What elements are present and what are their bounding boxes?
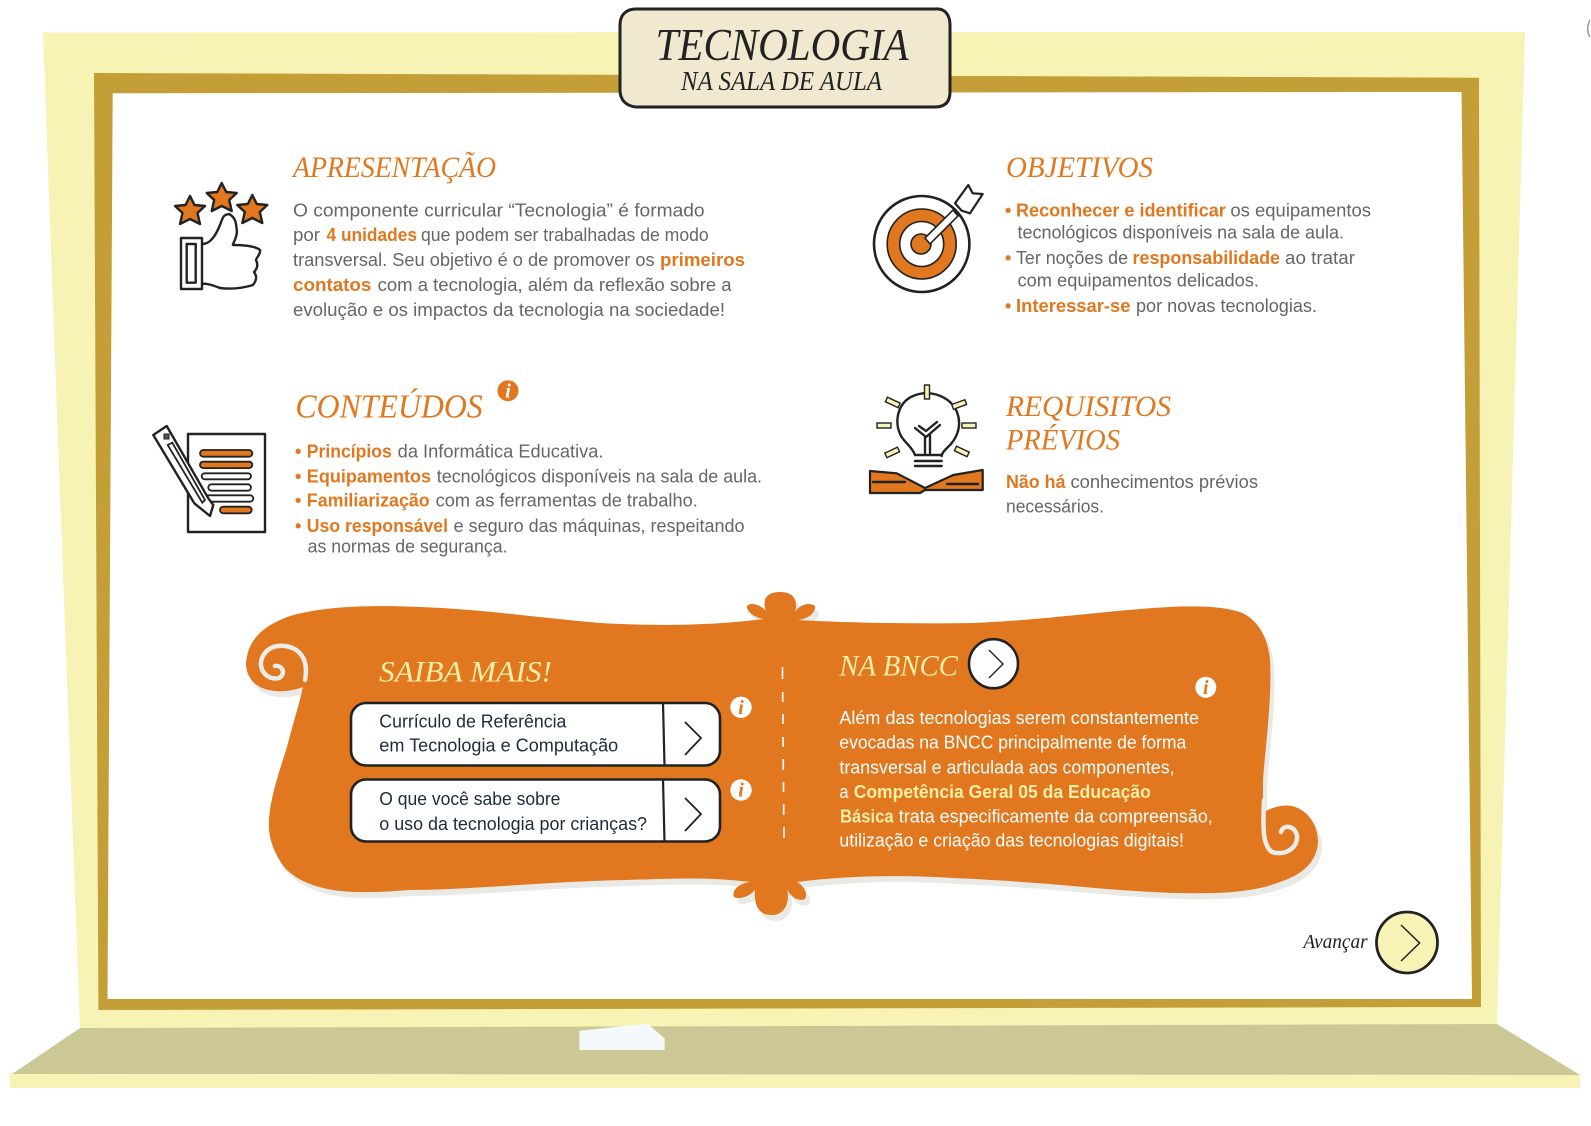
icon: info xyxy=(1195,677,1216,699)
panel: orange scroll xyxy=(246,592,1322,921)
text block: com a tecnologia, além da reflexão sobre a xyxy=(378,275,733,295)
title: TECNOLOGIA xyxy=(656,19,909,70)
bullet list: com as ferramentas de trabalho. xyxy=(436,491,698,511)
label: avançar: Avançar xyxy=(1301,931,1368,953)
scroll shadow xyxy=(250,598,1322,921)
icon: info: i xyxy=(738,780,744,802)
icon: light bulb over open book xyxy=(870,385,983,493)
icon: info: i xyxy=(738,697,744,719)
next button xyxy=(1301,912,1438,973)
text block: Não há xyxy=(1006,472,1066,492)
text block: bncc: Competência Geral 05 da Educação xyxy=(854,782,1151,802)
text block: necessários. xyxy=(1006,496,1104,516)
text block: contatos xyxy=(293,275,371,295)
text block: transversal. Seu objetivo é o de promover os xyxy=(293,250,655,270)
bullet list: as normas de segurança. xyxy=(308,537,508,557)
scroll body xyxy=(246,592,1318,915)
heading: PRÉVIOS xyxy=(1005,424,1120,456)
bullet list: da Informática Educativa. xyxy=(398,441,604,461)
bullet list: Uso responsável xyxy=(307,516,448,536)
button: currículo de referência xyxy=(351,703,720,766)
icon: info: i xyxy=(1203,677,1209,699)
icon: info: i xyxy=(505,380,511,402)
bullet list: Interessar-se xyxy=(1016,296,1130,316)
bullet list: os equipamentos xyxy=(1230,201,1371,221)
chalk tray xyxy=(10,1024,1580,1088)
bullet list: • xyxy=(295,516,301,536)
heading: na bncc: NA BNCC xyxy=(838,650,959,683)
text block: bncc: utilização e criação das tecnologias digitais! xyxy=(839,831,1184,851)
bullet list: Familiarização xyxy=(307,491,430,511)
bullet list: e seguro das máquinas, respeitando xyxy=(454,516,744,536)
icon: thumbs up with stars xyxy=(175,183,267,289)
text block: evolução e os impactos da tecnologia na sociedade! xyxy=(293,300,725,320)
text block: bncc: transversal e articulada aos componentes, xyxy=(839,757,1175,777)
panel: conteúdos xyxy=(153,380,762,557)
heading: saiba mais: SAIBA MAIS! xyxy=(379,656,552,689)
icon: info xyxy=(730,697,752,719)
heading xyxy=(1005,390,1171,456)
text block: bncc: Básica xyxy=(840,807,895,827)
button: o que você sabe xyxy=(351,780,720,842)
heading: APRESENTAÇÃO xyxy=(291,151,496,184)
title plate xyxy=(620,9,950,107)
bullet list: • xyxy=(1005,296,1011,316)
bullet list: ao tratar xyxy=(1285,248,1355,268)
bullet list: Reconhecer e identificar xyxy=(1016,201,1226,221)
bullet list: tecnológicos disponíveis na sala de aula. xyxy=(437,467,762,487)
text block: por xyxy=(293,225,320,245)
text block xyxy=(293,201,745,320)
scroll curls xyxy=(261,646,1297,853)
bullet list: por novas tecnologias. xyxy=(1136,296,1317,316)
button: currículo de referência: em Tecnologia e Computação xyxy=(379,736,618,756)
bullet list: Ter noções de xyxy=(1016,248,1128,268)
heading: OBJETIVOS xyxy=(1006,151,1153,184)
bullet list: responsabilidade xyxy=(1132,248,1280,268)
button: o que você sabe: O que você sabe sobre xyxy=(379,789,560,809)
button: currículo de referência: Currículo de Referência xyxy=(379,711,567,731)
button: o que você sabe: o uso da tecnologia por crianças? xyxy=(379,814,647,834)
icon: arrow circle xyxy=(1376,912,1438,973)
text block: primeiros xyxy=(660,250,745,270)
text block: bncc: evocadas na BNCC principalmente de forma xyxy=(839,732,1187,752)
text block: bncc: a xyxy=(839,782,849,802)
text block: 4 unidades xyxy=(326,225,417,245)
text block: que podem ser trabalhadas de modo xyxy=(421,225,709,245)
button: bncc arrow xyxy=(969,639,1018,688)
text block: bncc: trata especificamente da compreensão, xyxy=(899,807,1213,827)
heading: REQUISITOS xyxy=(1005,390,1171,423)
bullet list: tecnológicos disponíveis na sala de aula. xyxy=(1018,223,1344,243)
dashed divider xyxy=(782,667,784,838)
icon: target with arrow xyxy=(874,185,983,292)
bullet list xyxy=(1005,201,1371,316)
text block: O componente curricular “Tecnologia” é formado xyxy=(293,201,705,221)
text block: bncc: Além das tecnologias serem constantemente xyxy=(839,708,1199,728)
bullet list: • xyxy=(295,467,301,487)
heading: CONTEÚDOS xyxy=(295,387,483,425)
bullet list: • xyxy=(1005,248,1011,268)
bullet list: Princípios xyxy=(307,441,392,461)
text block: bncc xyxy=(839,708,1213,851)
panel: objetivos xyxy=(874,151,1371,316)
text block: conhecimentos prévios xyxy=(1070,472,1258,492)
icon: info xyxy=(730,779,752,802)
icon: document and pencil xyxy=(153,426,265,532)
subtitle: NA SALA DE AULA xyxy=(680,66,882,96)
icon: info xyxy=(498,380,518,402)
bullet list xyxy=(295,441,762,557)
bullet list: • xyxy=(295,491,301,511)
text block xyxy=(1006,472,1258,516)
bullet list: • xyxy=(295,441,301,461)
bullet list: Equipamentos xyxy=(307,467,431,487)
bullet list: • xyxy=(1005,201,1011,221)
bullet list: com equipamentos delicados. xyxy=(1018,271,1259,291)
panel: apresentação xyxy=(175,151,745,320)
panel: requisitos prévios xyxy=(870,385,1258,516)
